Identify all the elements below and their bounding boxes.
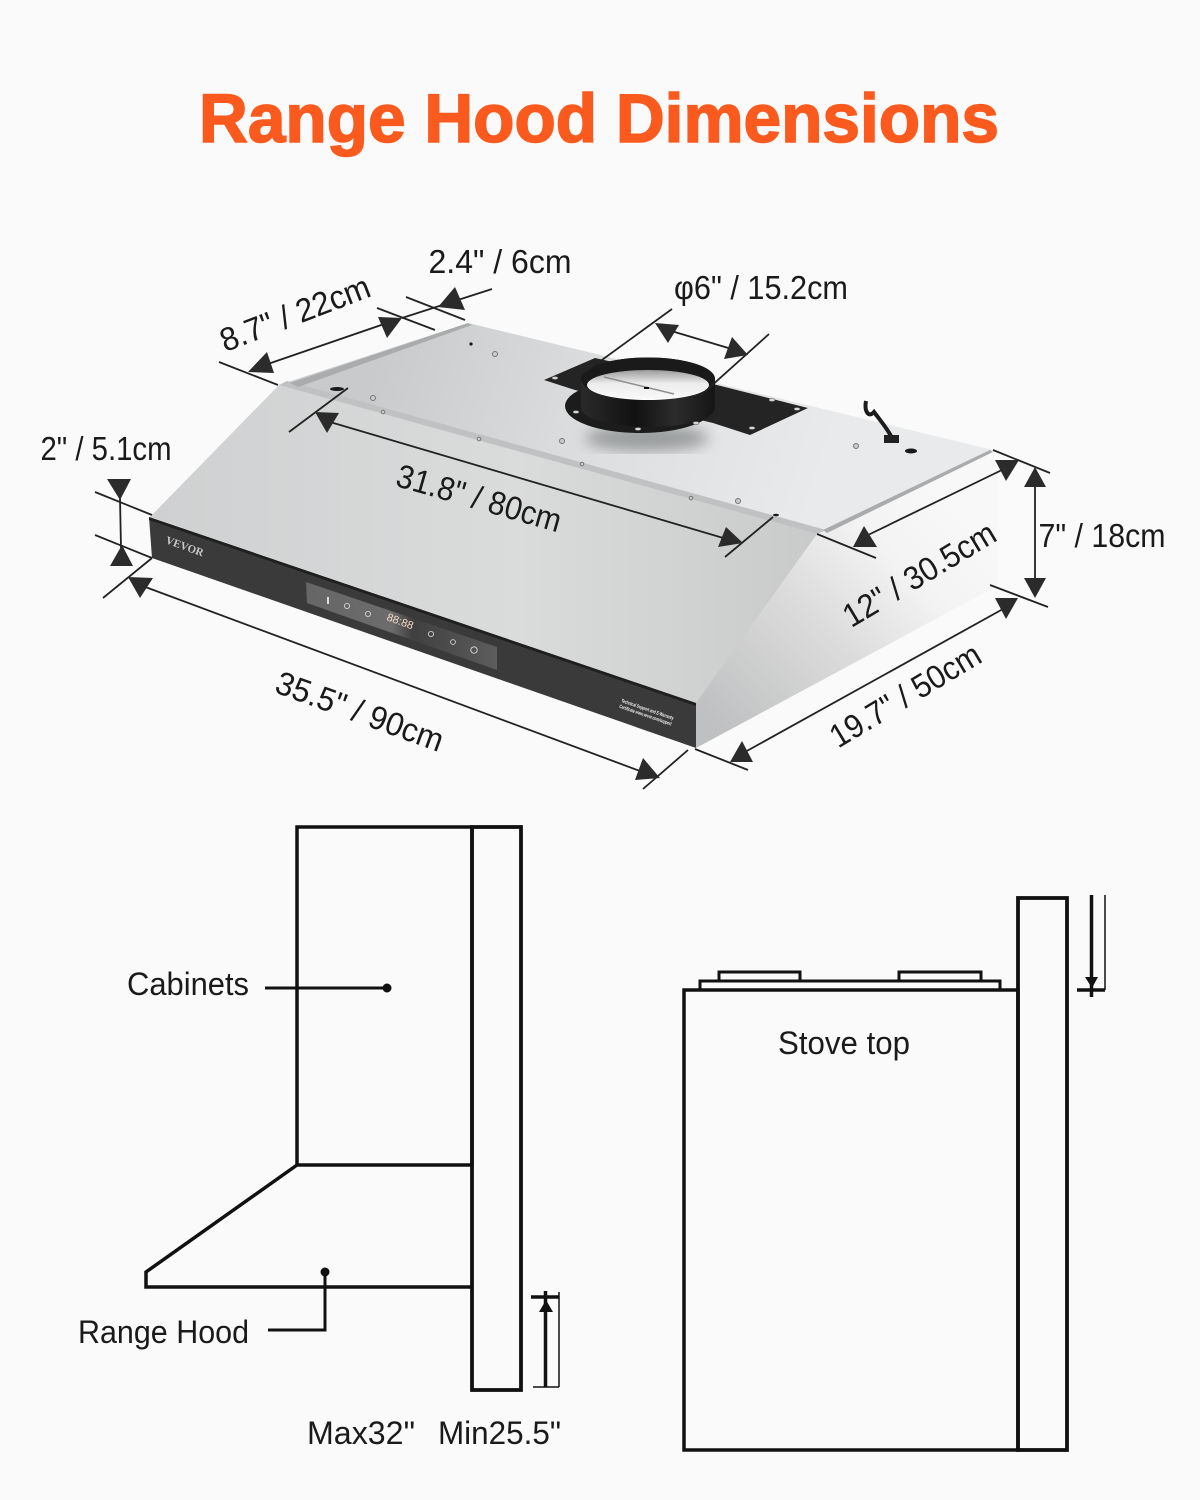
range hood outline	[146, 1165, 472, 1287]
black control band	[149, 517, 696, 748]
vent mounting plate	[544, 358, 808, 435]
range hood product illustration	[149, 323, 997, 748]
support text on band: Certificate www.vevor.com/support	[618, 704, 673, 728]
dimension: 31.8 in / 80 cm: 31.8" / 80cm	[392, 457, 566, 539]
title: Range Hood Dimensions	[199, 80, 999, 157]
dimension: 8.7 in / 22 cm	[214, 268, 435, 385]
dimension: 19.7 in / 50 cm: 19.7" / 50cm	[823, 636, 987, 755]
dimension: 8.7 in / 22 cm: 8.7" / 22cm	[214, 268, 375, 359]
clearance arrow	[1077, 895, 1105, 997]
Cabinets label: Cabinets	[127, 966, 249, 1002]
height arrow	[531, 1291, 559, 1387]
Range Hood label: Range Hood	[78, 1314, 249, 1350]
dimension: duct diameter: φ6" / 15.2cm	[674, 269, 848, 306]
cabinet outline	[297, 827, 472, 1165]
Stove top label: Stove top	[778, 1025, 910, 1061]
touch control panel: 88:88	[385, 612, 415, 632]
hood top panel	[279, 323, 993, 534]
dimension: 19.7 in / 50 cm	[695, 598, 1018, 770]
Max32 label: Max32"	[307, 1415, 415, 1451]
dimension: 12 in / 30.5 cm	[817, 450, 1050, 634]
dimension: 2 in / 5.1 cm: 2" / 5.1cm	[40, 430, 172, 467]
stove diagram	[684, 895, 1105, 1450]
dimension: 2.4 in / 6 cm	[402, 243, 572, 320]
Min25.5 label: Min25.5"	[438, 1415, 561, 1451]
support text on band: Technical Support and E-Warranty	[620, 698, 674, 722]
power cable	[866, 401, 899, 443]
round flange	[565, 379, 715, 433]
support text on band	[618, 698, 675, 728]
vent shadow	[585, 425, 709, 451]
plate screws	[552, 376, 800, 430]
wall outline left	[472, 827, 521, 1390]
dimension: duct diameter	[584, 269, 848, 397]
dimension: 2.4 in / 6 cm: 2.4" / 6cm	[428, 243, 572, 280]
dimension: 2 in / 5.1 cm	[40, 430, 172, 566]
Range Hood leader	[268, 1268, 330, 1330]
stove top plate and burners	[700, 972, 1000, 990]
VEVOR logo: VEVOR	[164, 535, 206, 560]
hood side panel	[696, 450, 997, 748]
Cabinets leader	[265, 984, 392, 992]
vent duct ring	[581, 358, 715, 427]
side-view installation diagram	[78, 827, 561, 1451]
touch control panel	[306, 582, 497, 670]
mounting holes	[330, 342, 917, 516]
dimension: 35.5 in / 90 cm: 35.5" / 90cm	[271, 664, 449, 759]
dimension: 35.5 in / 90 cm	[103, 558, 688, 789]
dimension: 12 in / 30.5 cm: 12" / 30.5cm	[836, 514, 1002, 634]
dimension: 31.8 in / 80 cm	[289, 388, 773, 557]
screws	[370, 352, 858, 504]
stove body	[684, 990, 1018, 1450]
dimension: 7 in / 18 cm: 7" / 18cm	[1038, 517, 1166, 554]
wall outline right	[1018, 898, 1067, 1450]
dimension: 7 in / 18 cm	[990, 467, 1166, 607]
hood sloped front panel	[150, 385, 817, 703]
